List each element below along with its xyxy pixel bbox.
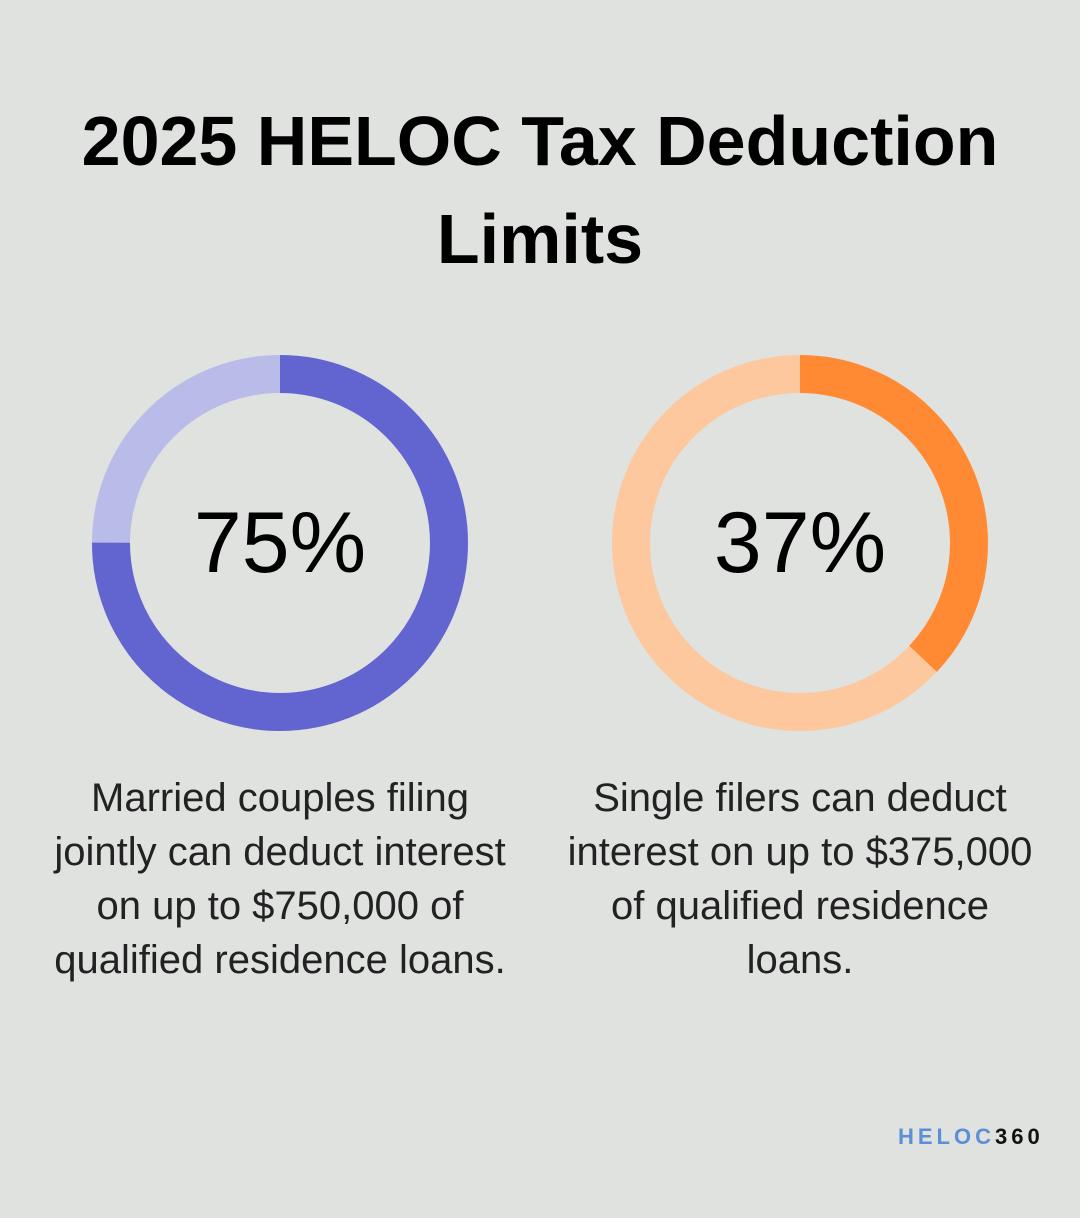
text: married couples [53,776,506,982]
text: married couples: Married couples filing [91,776,469,820]
title: Limits [437,200,643,278]
donut chart: 75%: 75% [194,495,366,591]
text: single filers [568,776,1032,982]
logo: HELOC360 [898,1124,1044,1149]
text: single filers: loans. [747,938,853,982]
text: single filers: interest on up to $375,000 [568,830,1032,874]
text: married couples: on up to $750,000 of [96,884,464,928]
text: married couples: qualified residence loans. [54,938,506,982]
donut chart: 37% [612,355,988,731]
text: single filers: Single filers can deduct [593,776,1007,820]
title: 2025 HELOC Tax Deduction [82,102,998,180]
donut chart: 37%: 37% [714,495,886,591]
text: married couples: jointly can deduct interest [54,830,506,874]
donut chart: 75% [92,355,468,731]
title [82,102,998,278]
text: single filers: of qualified residence [611,884,989,928]
